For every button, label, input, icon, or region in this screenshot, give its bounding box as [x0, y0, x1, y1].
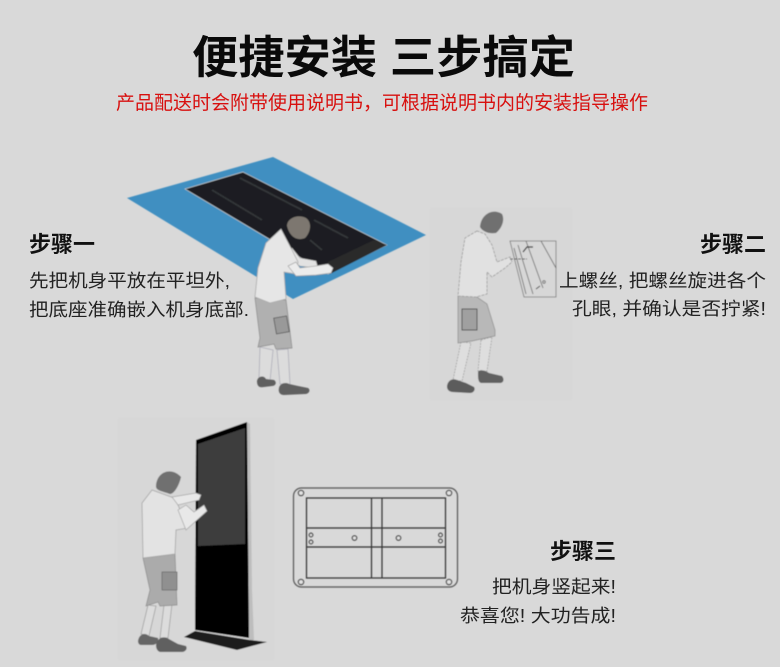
pocket [462, 309, 477, 330]
step two heading: 步骤二 [700, 232, 766, 257]
step one text: 把底座准确嵌入机身底部. [29, 300, 249, 320]
kiosk body [195, 422, 249, 638]
faded backdrop [430, 208, 572, 400]
step one heading: 步骤一 [29, 232, 95, 257]
legs [259, 347, 290, 384]
arms [172, 493, 207, 530]
legs [453, 337, 492, 381]
shorts [143, 554, 177, 606]
pocket [274, 316, 289, 334]
title: 便捷安装 三步搞定 [192, 32, 575, 83]
person three [138, 471, 207, 652]
panel: step three illustration [118, 418, 274, 660]
subtitle: 产品配送时会附带使用说明书，可根据说明书内的安装指导操作 [116, 92, 648, 114]
shorts [255, 298, 292, 349]
bracket close-up [510, 241, 556, 297]
shirt [458, 231, 512, 297]
legs [141, 604, 172, 638]
step two text: 上螺丝, 把螺丝旋进各个 [559, 271, 766, 291]
step three heading: 步骤三 [550, 539, 616, 564]
base being fitted [326, 240, 387, 274]
arm behind [288, 248, 318, 268]
faded backdrop [118, 418, 274, 660]
standing kiosk [184, 422, 267, 650]
panel: step two illustration [430, 208, 572, 400]
shirt [255, 229, 298, 303]
mounting plate diagram [294, 488, 458, 587]
inner frame [306, 498, 446, 578]
front arm [288, 262, 333, 276]
step one text: 先把机身平放在平坦外, [29, 271, 230, 291]
black screen lying flat [185, 172, 387, 274]
screen back detail [212, 178, 348, 250]
kiosk screen [198, 428, 245, 546]
step two text: 孔眼, 并确认是否拧紧! [572, 299, 766, 319]
step three text [460, 577, 616, 626]
shorts [458, 295, 495, 343]
kiosk base [184, 631, 267, 650]
plate outline [294, 488, 458, 587]
person two [447, 212, 512, 393]
horizontal beam [306, 528, 446, 547]
pocket [162, 572, 177, 590]
step three text: 把机身竖起来! [492, 577, 616, 597]
shirt [142, 490, 188, 558]
step two text [559, 271, 766, 319]
vertical beam [372, 498, 382, 578]
blue mat [127, 157, 426, 299]
panel: step one illustration [127, 157, 426, 395]
head [287, 216, 310, 239]
head [480, 212, 503, 233]
head [156, 471, 181, 494]
kiosk edge [247, 422, 254, 640]
shoes [447, 379, 475, 393]
step three text: 恭喜您! 大功告成! [460, 606, 616, 626]
step one text [29, 271, 249, 320]
holes [298, 490, 452, 585]
shoes [138, 634, 158, 645]
shoes [257, 377, 276, 387]
person one [255, 216, 333, 395]
